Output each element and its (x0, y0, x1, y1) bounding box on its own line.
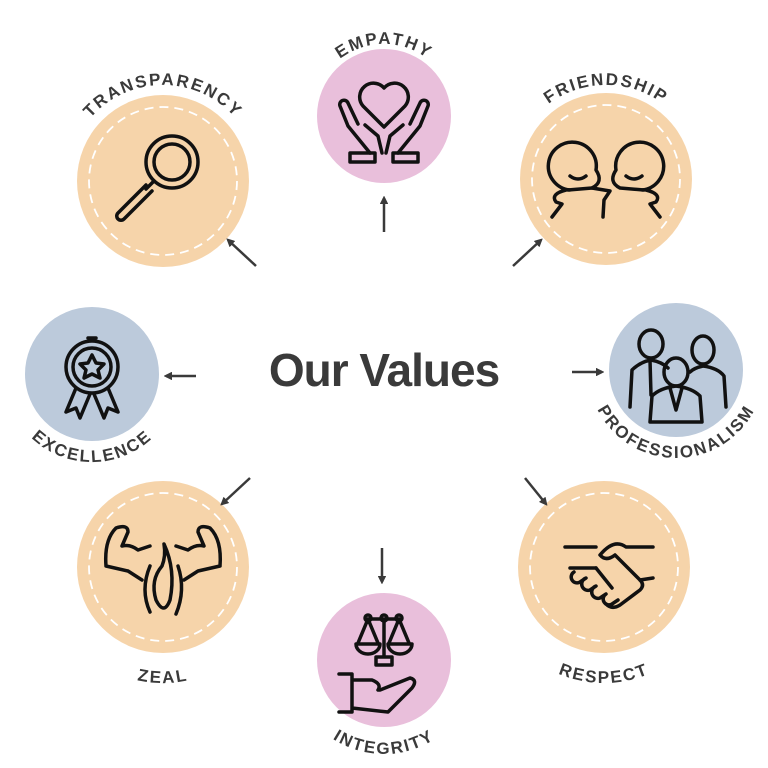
arrow: to transparency (228, 240, 256, 266)
icon: award ribbon (66, 338, 118, 418)
icon: hands with heart (340, 83, 428, 162)
label: empathy: EMPATHY (334, 32, 432, 58)
panel: zeal (77, 481, 249, 684)
label: integrity: INTEGRITY (334, 729, 430, 754)
icon: two friends (548, 142, 664, 217)
label: transparency: TRANSPARENCY (82, 73, 242, 116)
label: respect: RESPECT (559, 663, 644, 683)
title: Our Values (269, 344, 499, 396)
panel: empathy (317, 32, 451, 183)
arrow: to excellence (166, 375, 196, 377)
panel: friendship (520, 73, 692, 265)
label: professionalism: PROFESSIONALISM (598, 404, 754, 458)
arrow: to professionalism (572, 371, 602, 373)
arrow: to zeal (222, 478, 250, 504)
panel: respect (518, 481, 690, 683)
label: friendship: FRIENDSHIP (543, 73, 666, 104)
arrow: to respect (525, 478, 546, 504)
icon: magnifying glass (117, 136, 198, 220)
label: zeal: ZEAL (138, 668, 186, 684)
icon: business people (630, 330, 726, 422)
arrow: to empathy (383, 198, 385, 232)
label: excellence: EXCELLENCE (32, 430, 151, 462)
icon: muscles and flame (106, 527, 220, 614)
panel: professionalism (598, 303, 754, 458)
panel: integrity (317, 593, 451, 754)
panel: transparency (77, 73, 249, 267)
icon: scales on hand (339, 615, 415, 712)
arrow: to friendship (513, 240, 541, 266)
arrow: to integrity (381, 548, 383, 582)
panel: excellence (25, 307, 159, 462)
icon: handshake (565, 544, 653, 607)
